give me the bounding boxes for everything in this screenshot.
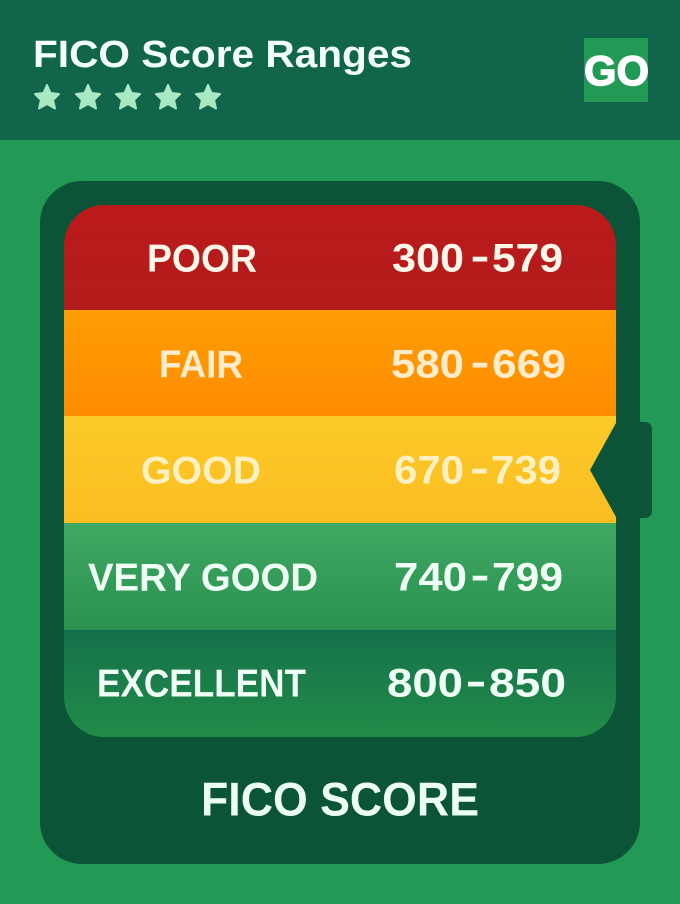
band: excellent: - (466, 660, 486, 704)
band: very good: 799 (492, 556, 563, 600)
band: excellent: EXCELLENT (97, 662, 306, 706)
band: excellent: 800 (387, 662, 463, 706)
band: excellent (64, 630, 616, 737)
band: very good: VERY GOOD (88, 556, 318, 600)
band: poor: - (470, 234, 490, 278)
slider handle (590, 422, 652, 518)
score bands (64, 205, 616, 737)
band: good (64, 416, 616, 523)
band: good: GOOD (141, 450, 261, 492)
band: good: 739 (491, 448, 561, 492)
band: poor: POOR (147, 238, 257, 280)
band: fair (64, 310, 616, 416)
band: fair: FAIR (159, 344, 243, 386)
header bar (0, 0, 680, 140)
band: good: 670 (394, 448, 464, 492)
card caption: FICO SCORE (201, 772, 479, 826)
band: excellent: 850 (489, 662, 566, 706)
band: very good: 740 (394, 556, 467, 600)
band: poor: 579 (492, 236, 563, 280)
band: fair: - (470, 340, 490, 384)
score card (40, 181, 652, 864)
band: poor (64, 205, 616, 310)
title: FICO Score Ranges (33, 34, 412, 76)
logo: GO: GO (584, 47, 649, 94)
star rating (35, 85, 220, 108)
band: very good (64, 523, 616, 630)
band: very good: - (470, 554, 490, 598)
band: fair: 580 (391, 342, 464, 386)
band: good: - (470, 446, 489, 490)
band: fair: 669 (492, 342, 566, 386)
band: poor: 300 (392, 236, 464, 280)
